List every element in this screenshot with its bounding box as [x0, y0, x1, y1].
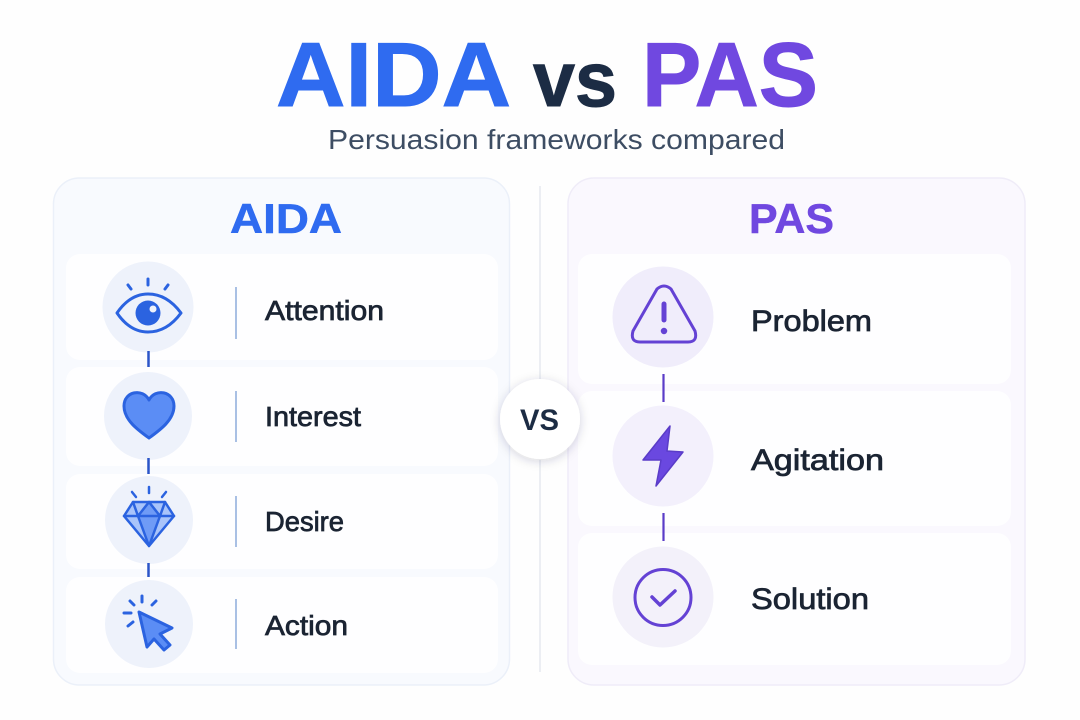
VS badge: [500, 379, 580, 459]
connectors: [662, 374, 665, 541]
title: AIDA: [276, 25, 511, 126]
row: Problem: Problem: [751, 305, 872, 338]
panel: PAS: [568, 178, 1025, 685]
icon: cursor: [124, 596, 172, 650]
row: Action: Action: [265, 610, 348, 641]
title: [276, 25, 818, 126]
row: Action: [66, 577, 498, 673]
icon: heart: [124, 393, 174, 438]
heading: PAS: PAS: [749, 195, 834, 242]
icon: eye: [117, 279, 181, 332]
icon: warning triangle: [632, 286, 696, 342]
row: Desire: [66, 474, 498, 569]
row: Attention: [66, 254, 498, 360]
panel background: [568, 178, 1025, 685]
icon: lightning bolt: [643, 426, 683, 486]
center divider line: [539, 186, 541, 672]
row: Solution: [578, 533, 1011, 665]
row: Interest: [66, 367, 498, 466]
VS badge: VS: [520, 404, 559, 437]
row: Attention: Attention: [265, 295, 384, 326]
row: Solution: Solution: [751, 583, 869, 616]
heading: AIDA: AIDA: [230, 195, 342, 242]
icon: diamond: [124, 487, 174, 546]
row: Agitation: [578, 391, 1011, 526]
row: Agitation: Agitation: [751, 444, 884, 477]
panel background: [54, 178, 510, 685]
panel: AIDA: [54, 178, 510, 685]
title: vs: [533, 35, 617, 123]
row: Interest: Interest: [265, 401, 361, 432]
title: PAS: [642, 25, 818, 126]
row: Problem: [578, 254, 1011, 384]
connectors: [147, 351, 150, 577]
row: Desire: Desire: [265, 506, 344, 537]
subtitle: Persuasion frameworks compared: [328, 124, 785, 155]
icon: check circle: [635, 570, 691, 626]
